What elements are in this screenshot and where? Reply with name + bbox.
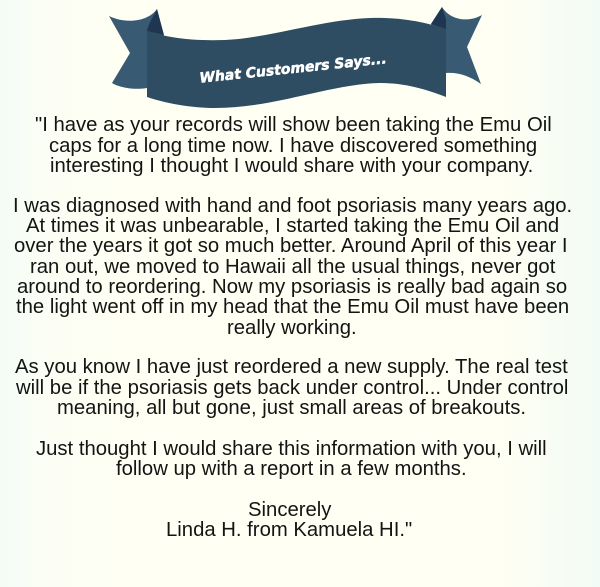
testimonial text: around to reordering. Now my psoriasis is really bad again so (17, 276, 567, 298)
ribbon right tail (431, 7, 482, 84)
testimonial text: As you know I have just reordered a new supply. The real test (15, 356, 568, 378)
testimonial text: caps for a long time now. I have discovered something (49, 135, 537, 157)
testimonial text: interesting I thought I would share with your company. (50, 155, 533, 177)
ribbon left tail (109, 9, 164, 89)
testimonial text: the light went off in my head that the Emu Oil must have been (16, 296, 569, 318)
testimonial text: meaning, all but gone, just small areas of breakouts. (57, 397, 526, 419)
testimonial text: will be if the psoriasis gets back under control... Under control (16, 377, 568, 399)
testimonial text: Linda H. from Kamuela HI." (166, 519, 412, 541)
ribbon right fold (431, 7, 446, 29)
testimonial text: Sincerely (248, 499, 331, 521)
testimonial text: I was diagnosed with hand and foot psoriasis many years ago. (13, 195, 572, 217)
testimonial text: ran out, we moved to Hawaii all the usual things, never got (30, 256, 555, 278)
banner title: What Customers Says... (199, 51, 387, 87)
testimonial text: At times it was unbearable, I started taking the Emu Oil and (26, 215, 559, 237)
ribbon main band (147, 18, 446, 108)
testimonial text: "I have as your records will show been taking the Emu Oil (35, 114, 552, 136)
testimonial text: over the years it got so much better. Around April of this year I (14, 235, 568, 257)
ribbon left fold (147, 9, 164, 35)
testimonial text: really working. (227, 317, 357, 339)
ribbon banner (109, 7, 482, 108)
testimonial text: Just thought I would share this information with you, I will (36, 438, 547, 460)
testimonial text: follow up with a report in a few months. (116, 458, 467, 480)
